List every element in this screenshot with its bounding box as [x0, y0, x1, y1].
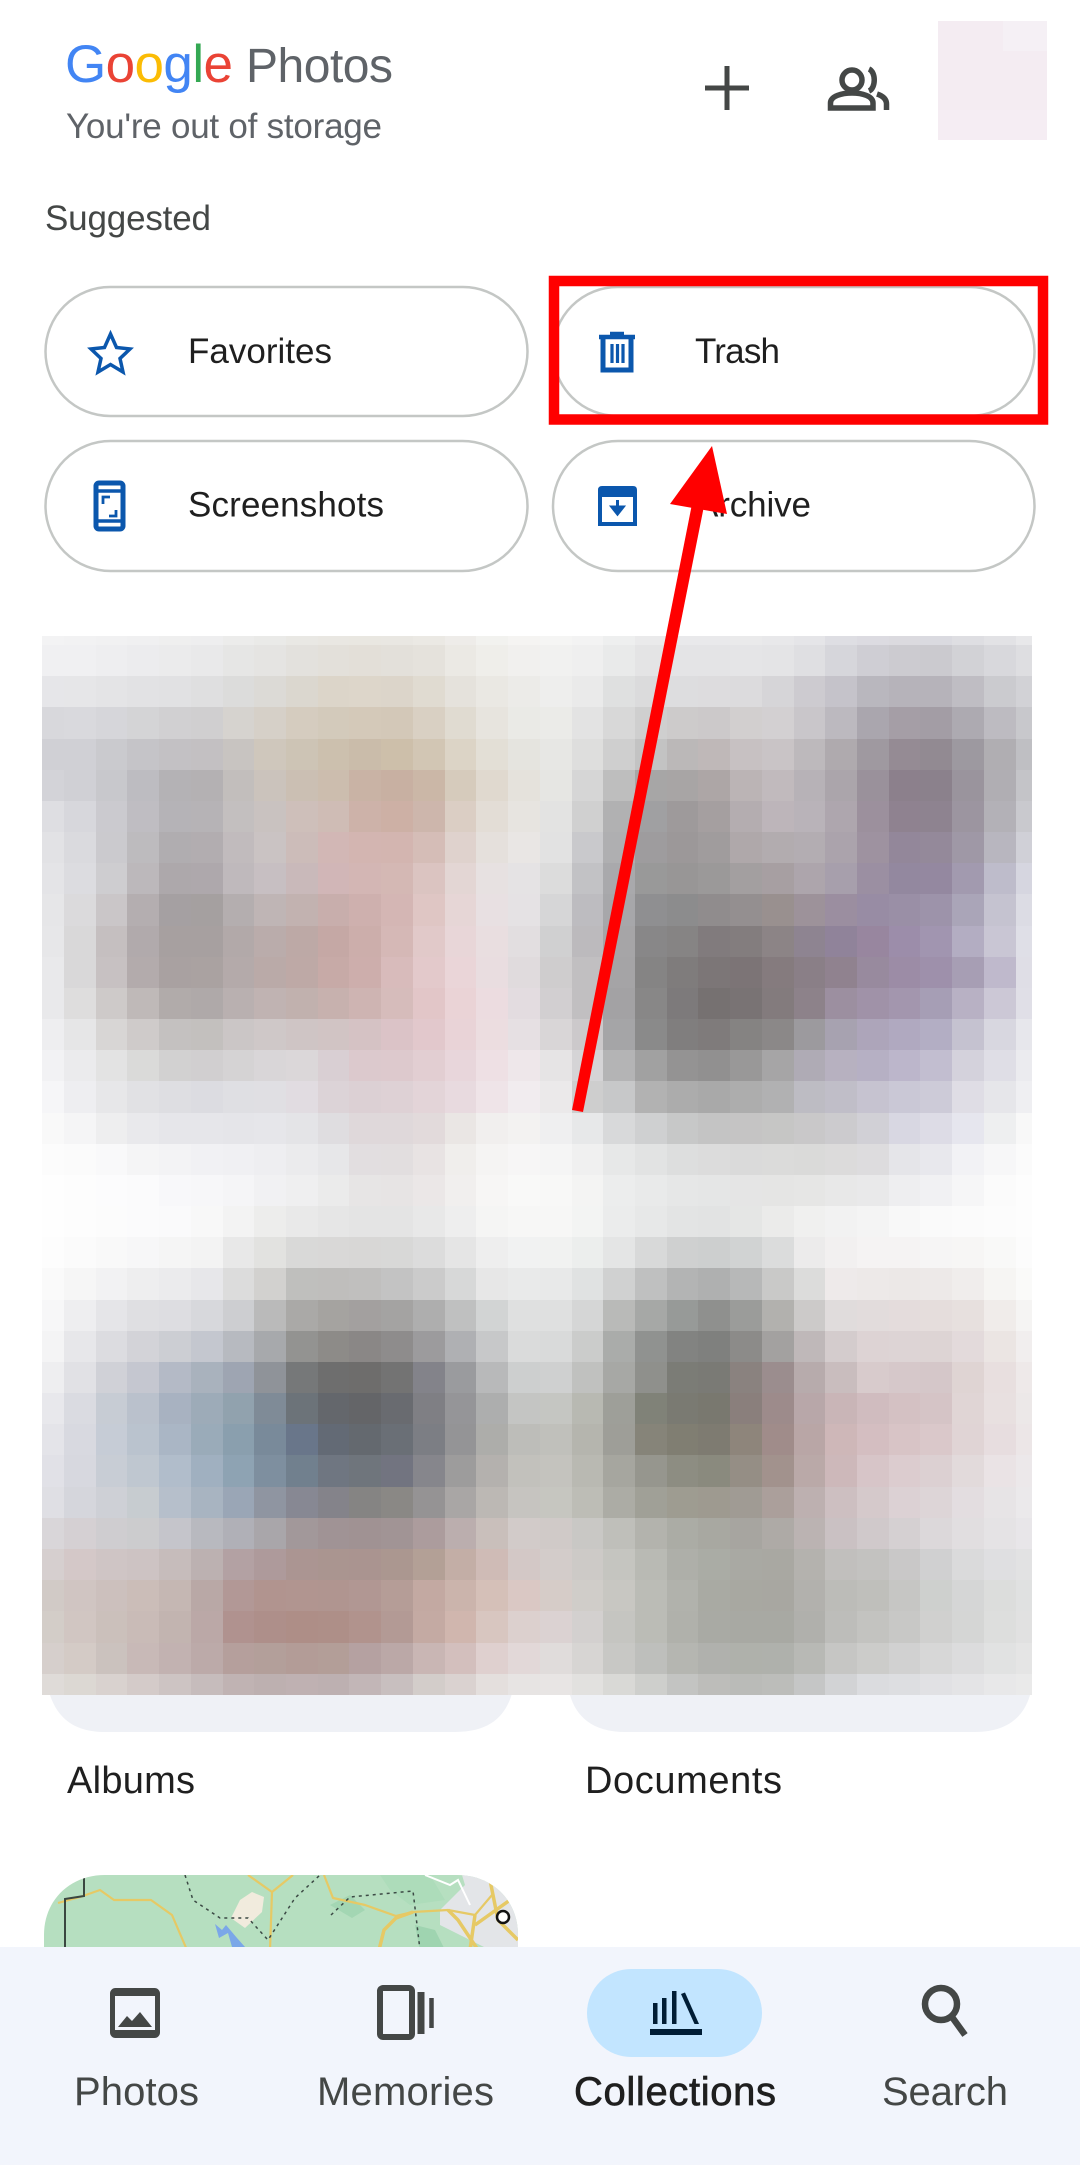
chip: Trash: [553, 287, 1034, 416]
icon: plus: [705, 66, 749, 110]
nav item: Photos: [74, 1990, 199, 2114]
label: Screenshots: Screenshots: [188, 486, 384, 524]
icon: memories cards: [380, 1988, 432, 2037]
logo: Google Photos: [65, 35, 393, 94]
icon: archive box: [598, 486, 637, 526]
icon: collections: [650, 1991, 702, 2035]
chip: Screenshots: [46, 441, 528, 571]
label: Archive: Archive: [695, 486, 811, 524]
label: Trash: Trash: [695, 332, 780, 371]
label: Albums: Albums: [67, 1760, 195, 1802]
label: Search: Search: [882, 2070, 1008, 2114]
storage status text: You're out of storage: [66, 107, 382, 146]
nav item: Memories: [317, 1988, 494, 2114]
header: [65, 21, 1047, 146]
icon: shared people: [830, 69, 886, 110]
icon: trash can: [599, 334, 635, 370]
logo: Google Photos: Photos: [246, 40, 393, 93]
icon: magnifier: [925, 1988, 965, 2035]
bottom navigation bar: [0, 1947, 1080, 2165]
nav item: Search: [882, 1988, 1008, 2114]
icon: phone screenshot: [96, 483, 123, 529]
icon: photo frame: [112, 1990, 158, 2036]
document tile bottom: [570, 1695, 1030, 1732]
icon: star: [91, 334, 130, 372]
nav item: Collections (active): [574, 1969, 776, 2114]
label: Collections: Collections: [574, 2070, 776, 2114]
arrow pointing to Trash: [572, 446, 727, 1112]
heading: Suggested: Suggested: [45, 199, 211, 238]
label: Documents: Documents: [585, 1760, 782, 1802]
callout: red highlight box around Trash: [554, 281, 1043, 420]
blurred photo mosaic: [42, 636, 1032, 1695]
label: Photos: Photos: [74, 2070, 199, 2114]
logo: Google Photos: Google: [65, 35, 233, 94]
map tile: [44, 1875, 518, 1950]
avatar: [938, 21, 1047, 140]
label: Memories: Memories: [317, 2070, 494, 2114]
label: Favorites: Favorites: [188, 332, 332, 371]
chip: Archive: [553, 441, 1034, 571]
album tile bottom: [50, 1695, 512, 1732]
active pill: [587, 1969, 762, 2057]
chip: Favorites: [46, 287, 528, 416]
